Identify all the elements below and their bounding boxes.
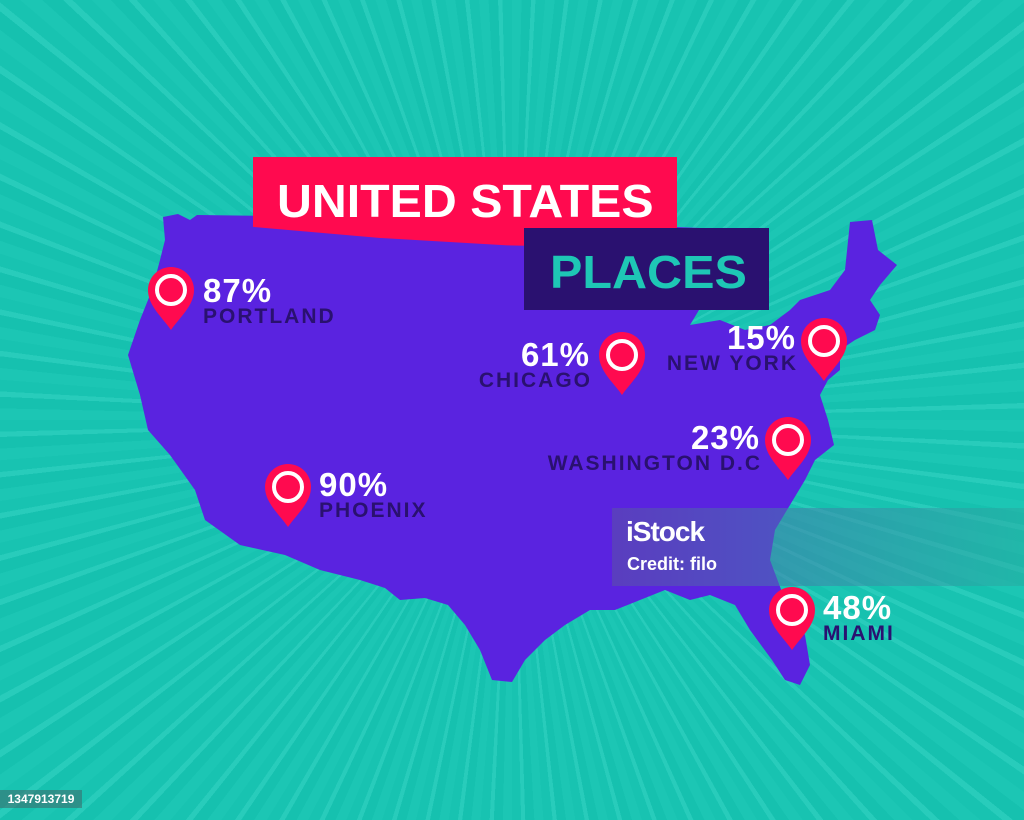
label: miami: MIAMI <box>823 622 895 645</box>
watermark: istock: Credit: filo <box>627 554 717 574</box>
label: new york: NEW YORK <box>667 352 798 375</box>
label: miami: 48% <box>823 589 892 626</box>
image id tag <box>0 790 82 808</box>
watermark: istock: iStock <box>626 516 704 547</box>
label: new york: 15% <box>727 319 796 356</box>
label: chicago: CHICAGO <box>479 369 592 392</box>
image id tag: 1347913719 <box>8 792 74 806</box>
pin: chicago <box>599 332 645 395</box>
title banner: united states: UNITED STATES <box>277 175 654 227</box>
label: washington dc: WASHINGTON D.C <box>548 452 762 475</box>
label: new york <box>667 319 798 375</box>
label: portland <box>203 272 336 328</box>
label: portland: PORTLAND <box>203 305 336 328</box>
subtitle box: places: PLACES <box>550 246 747 298</box>
pin: new york <box>801 318 847 381</box>
label: phoenix: PHOENIX <box>319 499 428 522</box>
subtitle box: places <box>524 228 769 310</box>
label: phoenix <box>319 466 428 522</box>
label: portland: 87% <box>203 272 272 309</box>
pin: portland <box>148 267 194 330</box>
label: washington dc: 23% <box>691 419 760 456</box>
watermark: istock <box>612 508 1024 586</box>
title banner: united states <box>253 157 677 249</box>
label: chicago: 61% <box>521 336 590 373</box>
label: washington dc <box>548 419 762 475</box>
label: phoenix: 90% <box>319 466 388 503</box>
pin: washington dc <box>765 417 811 480</box>
label: chicago <box>479 336 592 392</box>
label: miami <box>823 589 895 645</box>
pin: miami <box>769 587 815 650</box>
pin: phoenix <box>265 464 311 527</box>
